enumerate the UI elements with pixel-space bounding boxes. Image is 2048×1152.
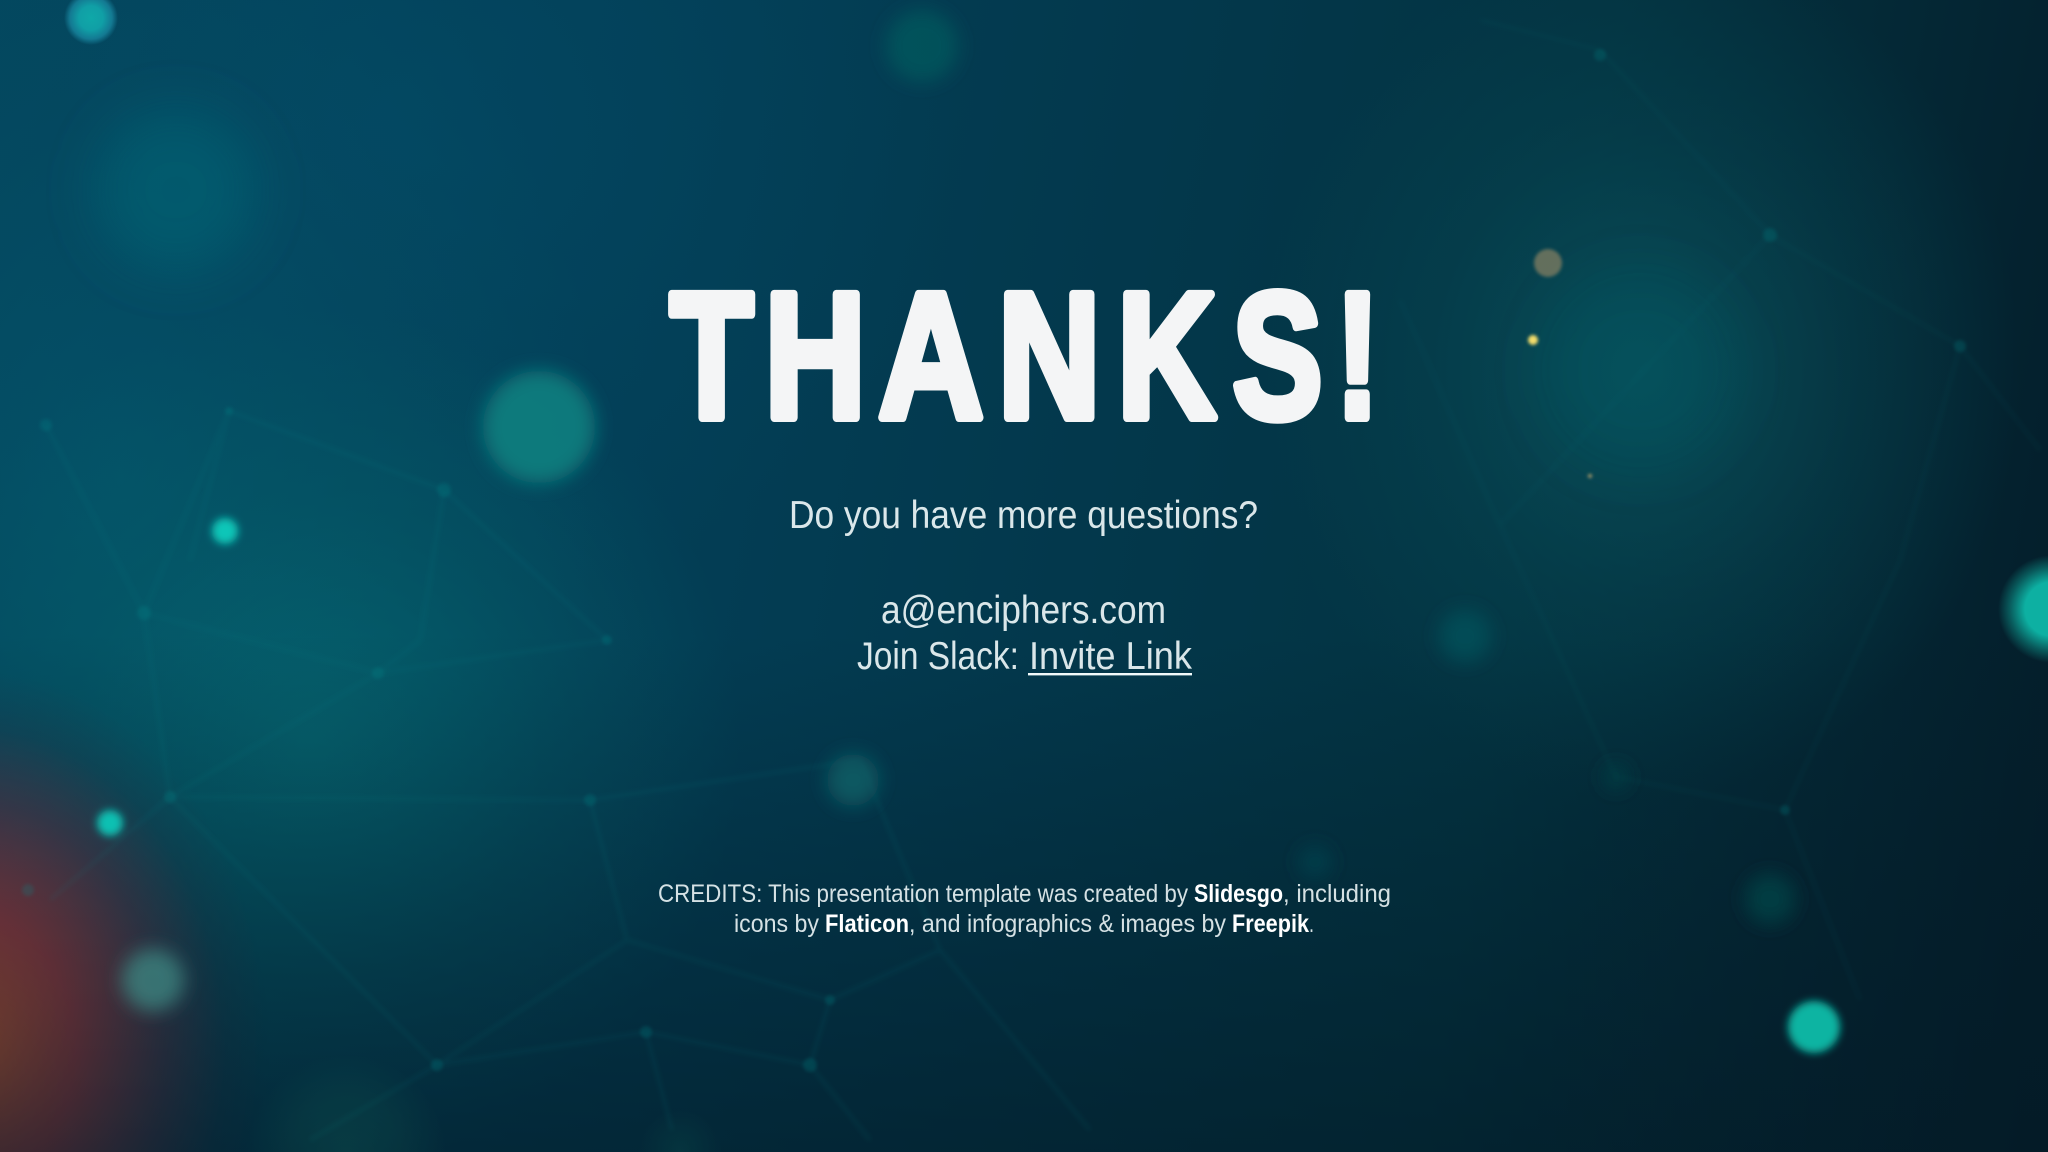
title	[670, 256, 1379, 456]
credits: icons by	[734, 910, 819, 938]
bokeh: medium soft	[122, 10, 1795, 1011]
title: S	[1232, 256, 1322, 456]
title: K	[1117, 256, 1216, 456]
network mesh: right	[1400, 20, 2040, 1000]
credits: Freepik	[1232, 910, 1309, 938]
slack line	[857, 635, 1192, 678]
credits: .	[1309, 910, 1314, 938]
slack line: Join Slack:	[857, 635, 1019, 678]
title: N	[998, 256, 1100, 456]
title: H	[765, 256, 866, 456]
credits: Slidesgo	[1194, 880, 1283, 908]
slack line: Invite Link	[1029, 635, 1192, 678]
title: A	[878, 256, 984, 456]
bokeh: tan spot	[1534, 249, 1562, 277]
bokeh: gold sparks	[1528, 335, 1592, 478]
credits: , and infographics & images by	[909, 910, 1226, 938]
bokeh: bright	[97, 518, 1840, 1053]
network mesh: left	[46, 411, 1090, 1140]
question line: Do you have more questions?	[789, 494, 1258, 537]
bokeh: large soft	[96, 110, 1740, 470]
credits: Flaticon	[825, 910, 909, 938]
title: !	[1336, 256, 1379, 456]
credits	[658, 880, 1391, 938]
credits: , including	[1283, 880, 1391, 908]
title: T	[670, 256, 753, 456]
email: a@enciphers.com	[881, 589, 1166, 632]
credits: CREDITS: This presentation template was created by	[658, 880, 1188, 908]
